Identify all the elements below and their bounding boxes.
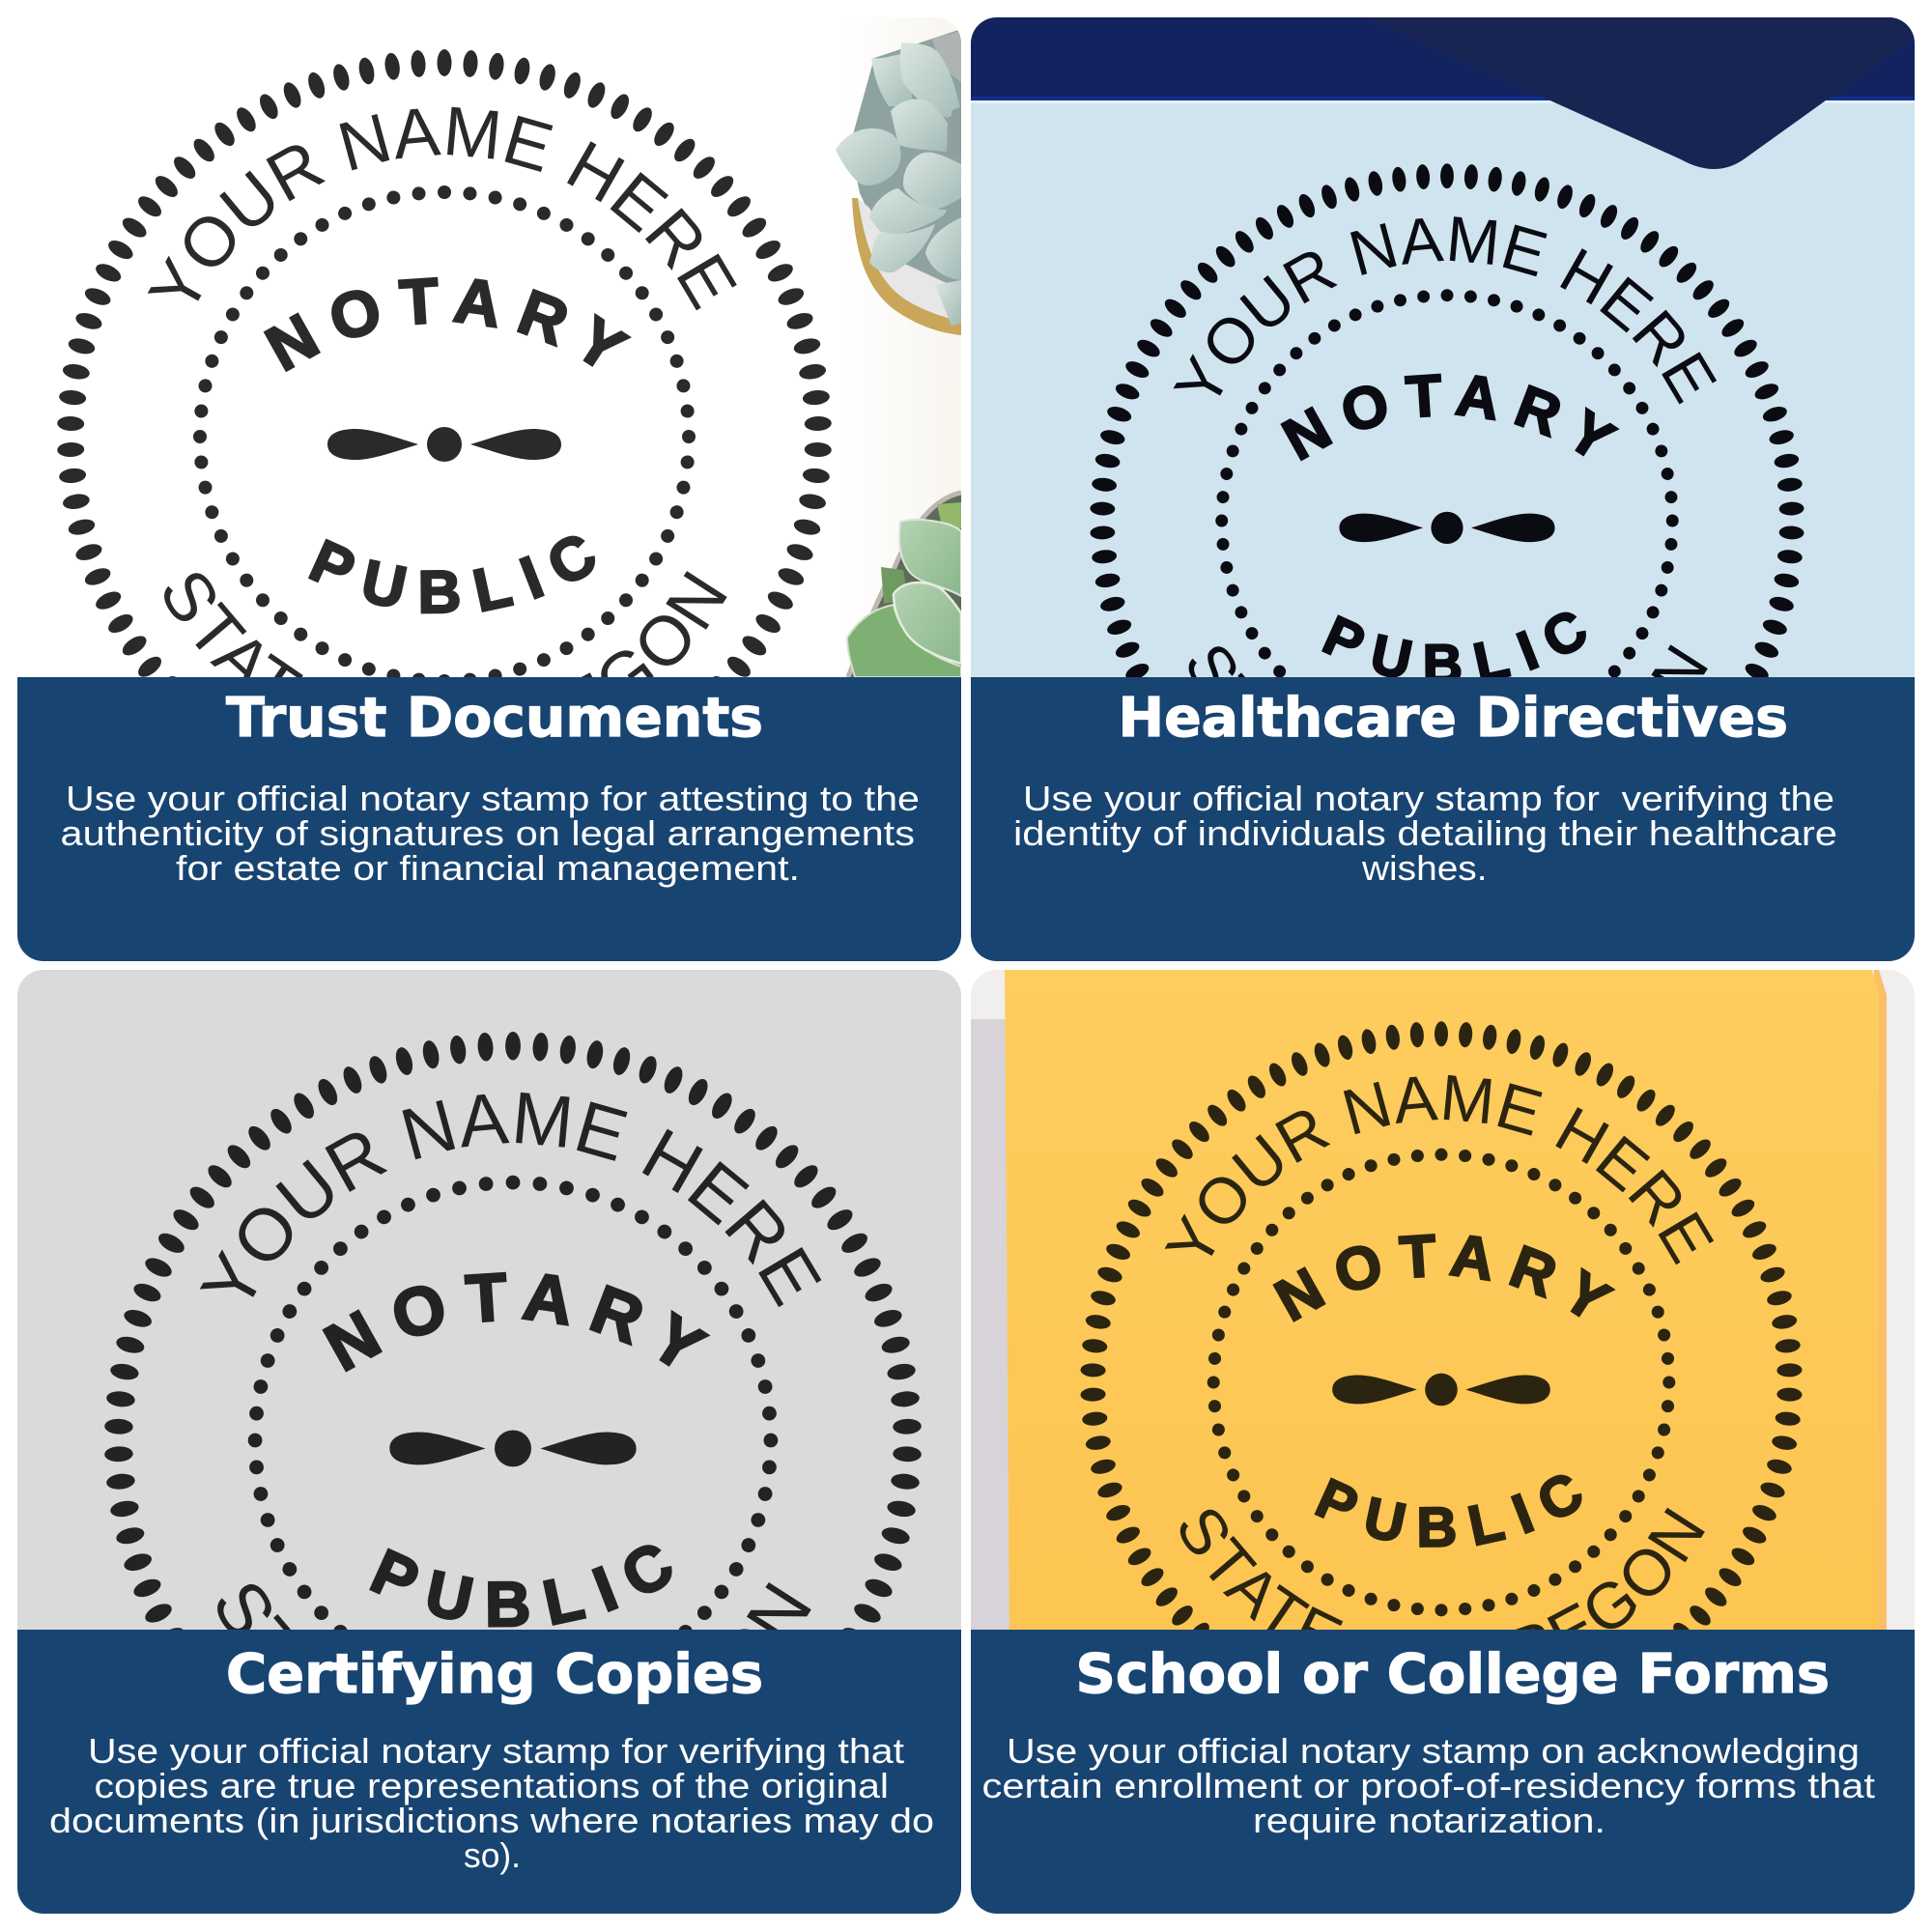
stamp outer bead ring (104, 1032, 922, 1630)
description text: wishes. (1361, 848, 1488, 888)
stamp text: your name here: YOUR NAME HERE (1173, 216, 1718, 404)
stamp text: state of oregon: STATE OF OREGON (164, 571, 727, 677)
stamp outer bead ring (1080, 1021, 1803, 1630)
photo: white desk with succulents (57, 17, 961, 677)
description text (60, 779, 920, 888)
description text: Use your official notary stamp for verifying that (88, 1731, 904, 1771)
notary stamp (57, 49, 832, 677)
stamp emblem (1339, 512, 1555, 544)
description text: identity of individuals detailing their healthcare (1013, 813, 1837, 853)
caption box (17, 677, 961, 961)
stamp text: notary: NOTARY (1272, 1234, 1616, 1322)
description text: documents (in jurisdictions where notaries may do (49, 1801, 934, 1840)
caption box (971, 677, 1915, 961)
stamp text: state of oregon: STATE OF OREGON (1188, 644, 1708, 677)
notary stamp (1080, 1021, 1803, 1630)
notary stamp (104, 1032, 922, 1630)
description text: authenticity of signatures on legal arrangements (60, 813, 915, 853)
caption box (17, 1630, 961, 1914)
stamp inner dot ring (1215, 289, 1679, 677)
description text (1013, 779, 1837, 888)
description text (981, 1731, 1875, 1840)
stamp emblem (1332, 1374, 1550, 1406)
stamp text: notary: NOTARY (1280, 373, 1620, 462)
stamp emblem (389, 1430, 637, 1466)
stamp inner dot ring (247, 1175, 779, 1630)
heading: school or college forms: School or College Forms (1076, 1643, 1830, 1706)
caption box (971, 1630, 1915, 1914)
description text: for estate or financial management. (176, 848, 800, 888)
description text: Use your official notary stamp for verifying the (1023, 779, 1834, 818)
photo: yellow sticky notes (971, 970, 1915, 1630)
panel: school or college forms (971, 970, 1915, 1914)
sticky note edge (1874, 970, 1887, 1630)
envelope flap (1366, 17, 1915, 169)
heading: trust documents: Trust Documents (226, 687, 763, 750)
stamp emblem (327, 427, 561, 462)
description text (49, 1731, 934, 1875)
description text: require notarization. (1253, 1801, 1605, 1840)
heading: healthcare directives: Healthcare Directives (1119, 687, 1788, 750)
stamp outer bead ring (57, 49, 832, 677)
stamp text: state of oregon: STATE OF OREGON (217, 1582, 811, 1630)
sticky note (1005, 970, 1879, 1630)
description text: Use your official notary stamp for attesting to the (66, 779, 920, 818)
stamp text: public: PUBLIC (1314, 1474, 1582, 1548)
stamp text: your name here: YOUR NAME HERE (1165, 1074, 1714, 1265)
icon: upper succulent (836, 29, 961, 335)
panel: healthcare directives (971, 17, 1915, 961)
panel: trust documents (17, 17, 961, 961)
panel: certifying copies (17, 970, 961, 1914)
stamp text: your name here: YOUR NAME HERE (147, 106, 737, 311)
heading: certifying copies: Certifying Copies (226, 1643, 763, 1706)
stamp text: public: PUBLIC (1321, 612, 1586, 677)
description text: certain enrollment or proof-of-residency forms that (981, 1766, 1875, 1805)
notary stamp (1090, 163, 1804, 677)
stamp inner dot ring (1208, 1148, 1675, 1617)
photo: blue paper and navy envelope (971, 17, 1915, 677)
stamp text: notary: NOTARY (263, 276, 632, 373)
icon: lower succulent (847, 493, 961, 677)
stamp text: state of oregon: STATE OF OREGON (1180, 1507, 1705, 1630)
description text: Use your official notary stamp on acknowledging (1007, 1731, 1860, 1771)
stamp text: notary: NOTARY (323, 1271, 711, 1373)
stamp text: public: PUBLIC (307, 535, 595, 614)
stamp text: public: PUBLIC (369, 1545, 672, 1627)
stamp text: your name here: YOUR NAME HERE (199, 1092, 821, 1308)
description text: so). (464, 1835, 521, 1875)
stamp inner dot ring (193, 185, 696, 677)
stamp outer bead ring (1090, 163, 1804, 677)
description text: copies are true representations of the original (95, 1766, 889, 1805)
photo: grey paper (17, 970, 961, 1630)
